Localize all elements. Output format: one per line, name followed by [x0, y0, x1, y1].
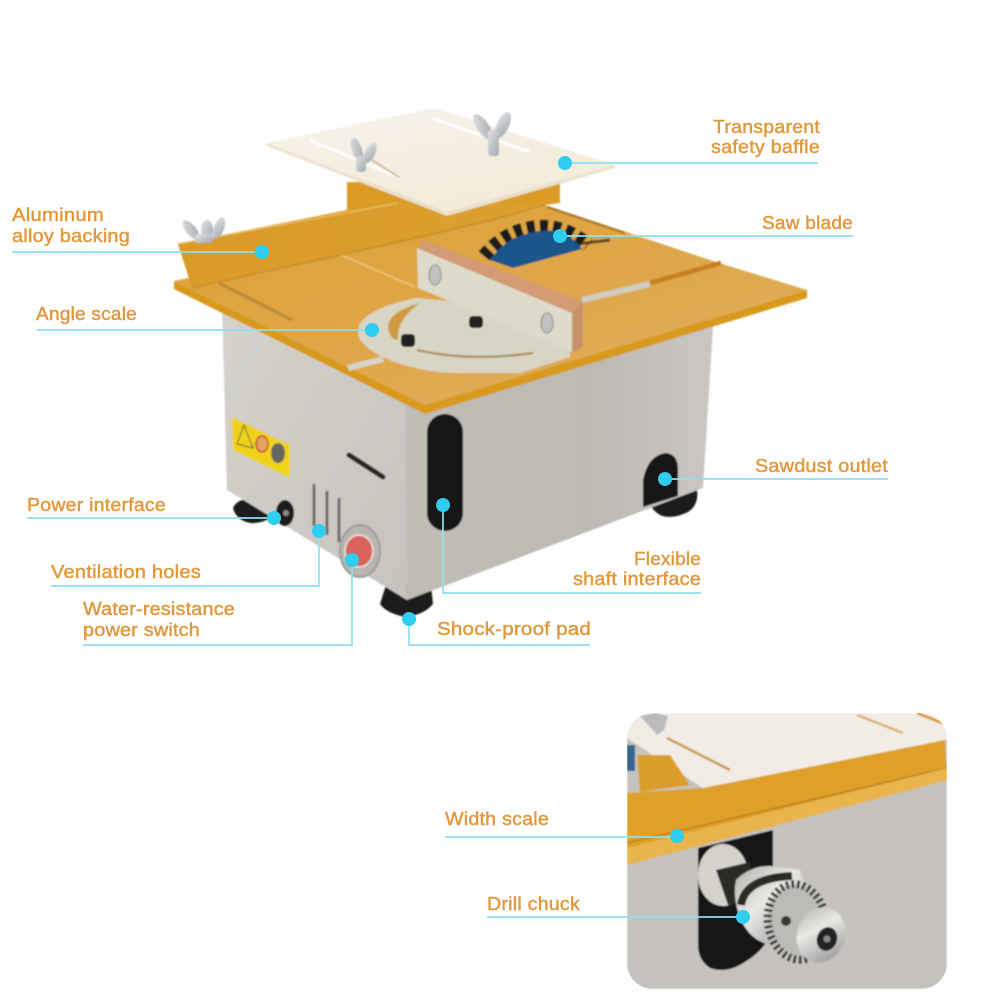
inset baffle slots: [667, 713, 945, 770]
callout: power interface: [27, 495, 281, 525]
table top surface: [174, 205, 807, 405]
inset baffle: [627, 713, 947, 788]
callout: transparent safety baffle: Transparent: [713, 117, 820, 137]
callout: angle scale: Angle scale: [36, 304, 137, 324]
callout: water-resistance power switch: [83, 553, 359, 645]
callout: ventilation holes: Ventilation holes: [51, 562, 201, 582]
callout: transparent safety baffle: [558, 117, 820, 170]
inset black slot: [698, 830, 773, 970]
callout: saw blade: [553, 213, 853, 243]
right extension slot: [650, 263, 721, 283]
callout: width scale: Width scale: [445, 809, 549, 829]
callout: sawdust outlet: [658, 456, 888, 486]
inset wing nut: [640, 713, 668, 735]
callout: aluminum alloy backing: Aluminum: [12, 205, 104, 225]
warning label: [232, 417, 290, 478]
callout: water-resistance power switch: power switch: [83, 620, 200, 640]
body right face: [405, 310, 714, 600]
callout: water-resistance power switch: Water-resistance: [83, 599, 235, 619]
inset blue blade edge: [627, 745, 635, 771]
callout: shock-proof pad: Shock-proof pad: [437, 619, 591, 639]
body left face: [222, 300, 407, 600]
waterproof power switch: [340, 525, 380, 577]
inset flange disc: [698, 844, 748, 906]
inset gold block: [637, 755, 690, 792]
callout: sawdust outlet: Sawdust outlet: [755, 456, 888, 476]
wing nuts: [179, 110, 514, 243]
aluminum alloy fence backing: [178, 182, 560, 288]
inset photo: drill chuck detail: [627, 713, 947, 989]
callout: flexible shaft interface: Flexible: [634, 549, 701, 569]
table top edge: [174, 281, 807, 414]
saw blade: [484, 227, 588, 268]
ventilation holes: [314, 484, 339, 542]
callout: drill chuck: [487, 894, 750, 924]
callout: ventilation holes: [51, 524, 326, 586]
table slots and rails: [219, 207, 650, 368]
callout: aluminum alloy backing: alloy backing: [12, 226, 130, 246]
mitre gauge with angle scale: [358, 240, 583, 373]
shock-proof feet: [233, 490, 697, 617]
inset background: grey body: [627, 713, 947, 989]
main product: mini table saw: [174, 108, 807, 617]
flexible shaft slot: [427, 414, 463, 531]
callout: width scale: [445, 809, 684, 843]
sawdust outlet: [643, 453, 678, 507]
power interface socket: [276, 500, 294, 526]
callout: angle scale: [36, 304, 379, 337]
callout: flexible shaft interface: [436, 498, 701, 593]
callout: drill chuck: Drill chuck: [487, 894, 581, 914]
drill chuck: [716, 862, 853, 970]
callout: power interface: Power interface: [27, 495, 166, 515]
transparent safety baffle: [267, 108, 615, 216]
callout: flexible shaft interface: shaft interface: [573, 569, 701, 589]
inset fence and table edge: [627, 740, 947, 865]
speed slit: [349, 455, 383, 477]
callout: saw blade: Saw blade: [762, 213, 853, 233]
callout: aluminum alloy backing: [12, 205, 269, 259]
callout: transparent safety baffle: safety baffle: [711, 137, 820, 157]
callout: shock-proof pad: [402, 612, 591, 645]
